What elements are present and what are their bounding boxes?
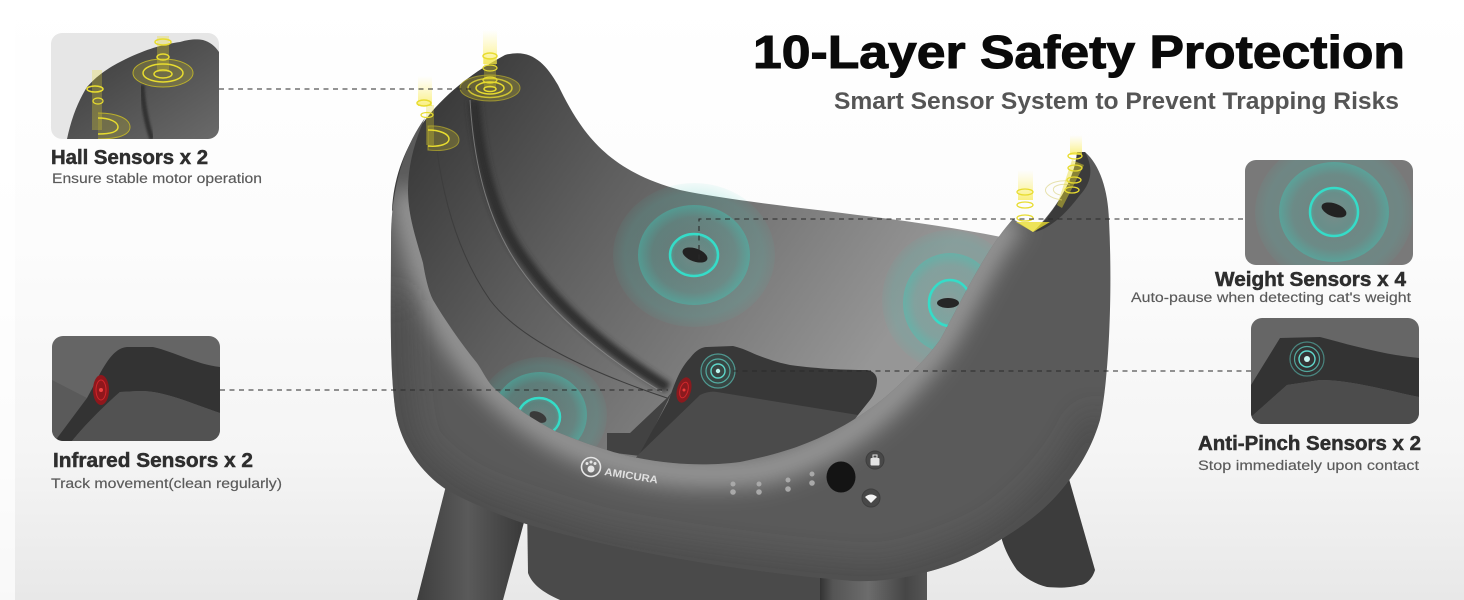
description: Ensure stable motor operation: [52, 171, 262, 186]
hall sensor left: [417, 76, 459, 151]
connector: weight: [699, 219, 1243, 262]
thumbnail: infrared: [52, 336, 220, 441]
panel: weight sensors: [1131, 160, 1413, 306]
front left leg: [417, 470, 530, 600]
camera lens: [826, 462, 856, 492]
panel: hall sensors: [51, 33, 262, 186]
status lights: [730, 472, 815, 495]
logo: [582, 458, 659, 486]
description: Track movement(clean regularly): [51, 476, 282, 491]
connector: infrared: [220, 389, 668, 391]
hall sensor top: [460, 30, 520, 101]
subtitle: Smart Sensor System to Prevent Trapping Risks: [834, 88, 1399, 115]
thumbnail: anti-pinch: [1251, 318, 1419, 424]
right rim inner: [1035, 152, 1090, 232]
product: litter robot: [385, 30, 1120, 600]
front right leg: [1000, 465, 1095, 588]
sensor: weight sensor left: [477, 357, 607, 473]
centre leg: [820, 555, 927, 600]
hall sensors right rim: [1016, 135, 1084, 232]
interior ridge: [437, 100, 668, 398]
heading: Hall Sensors x 2: [51, 147, 208, 169]
connector: hall: [219, 88, 472, 90]
button: wifi: [862, 489, 880, 507]
thumbnail: hall sensors: [51, 33, 219, 139]
title: 10-Layer Safety Protection: [753, 26, 1405, 78]
base tray and step: [607, 346, 877, 475]
drawer: [527, 500, 860, 600]
heading: Infrared Sensors x 2: [53, 450, 253, 472]
panel: infrared sensors: [51, 336, 282, 491]
description: Stop immediately upon contact: [1198, 458, 1419, 473]
front body crescent: [385, 110, 1120, 590]
sensor: weight sensor centre: [613, 183, 775, 327]
logo: AMICURA: [604, 466, 659, 486]
sensor: weight sensor right: [882, 230, 1018, 370]
button: home: [866, 451, 884, 469]
panel: anti-pinch sensors: [1198, 318, 1421, 473]
thumbnail: weight: [1245, 160, 1413, 265]
anti-pinch sensor: [701, 354, 735, 388]
heading: Anti-Pinch Sensors x 2: [1198, 433, 1421, 455]
bowl interior wall: [392, 53, 1015, 470]
connector: anti-pinch: [730, 370, 1251, 372]
infrared sensor: [674, 376, 694, 404]
description: Auto-pause when detecting cat's weight: [1131, 290, 1411, 305]
heading: Weight Sensors x 4: [1215, 269, 1407, 291]
